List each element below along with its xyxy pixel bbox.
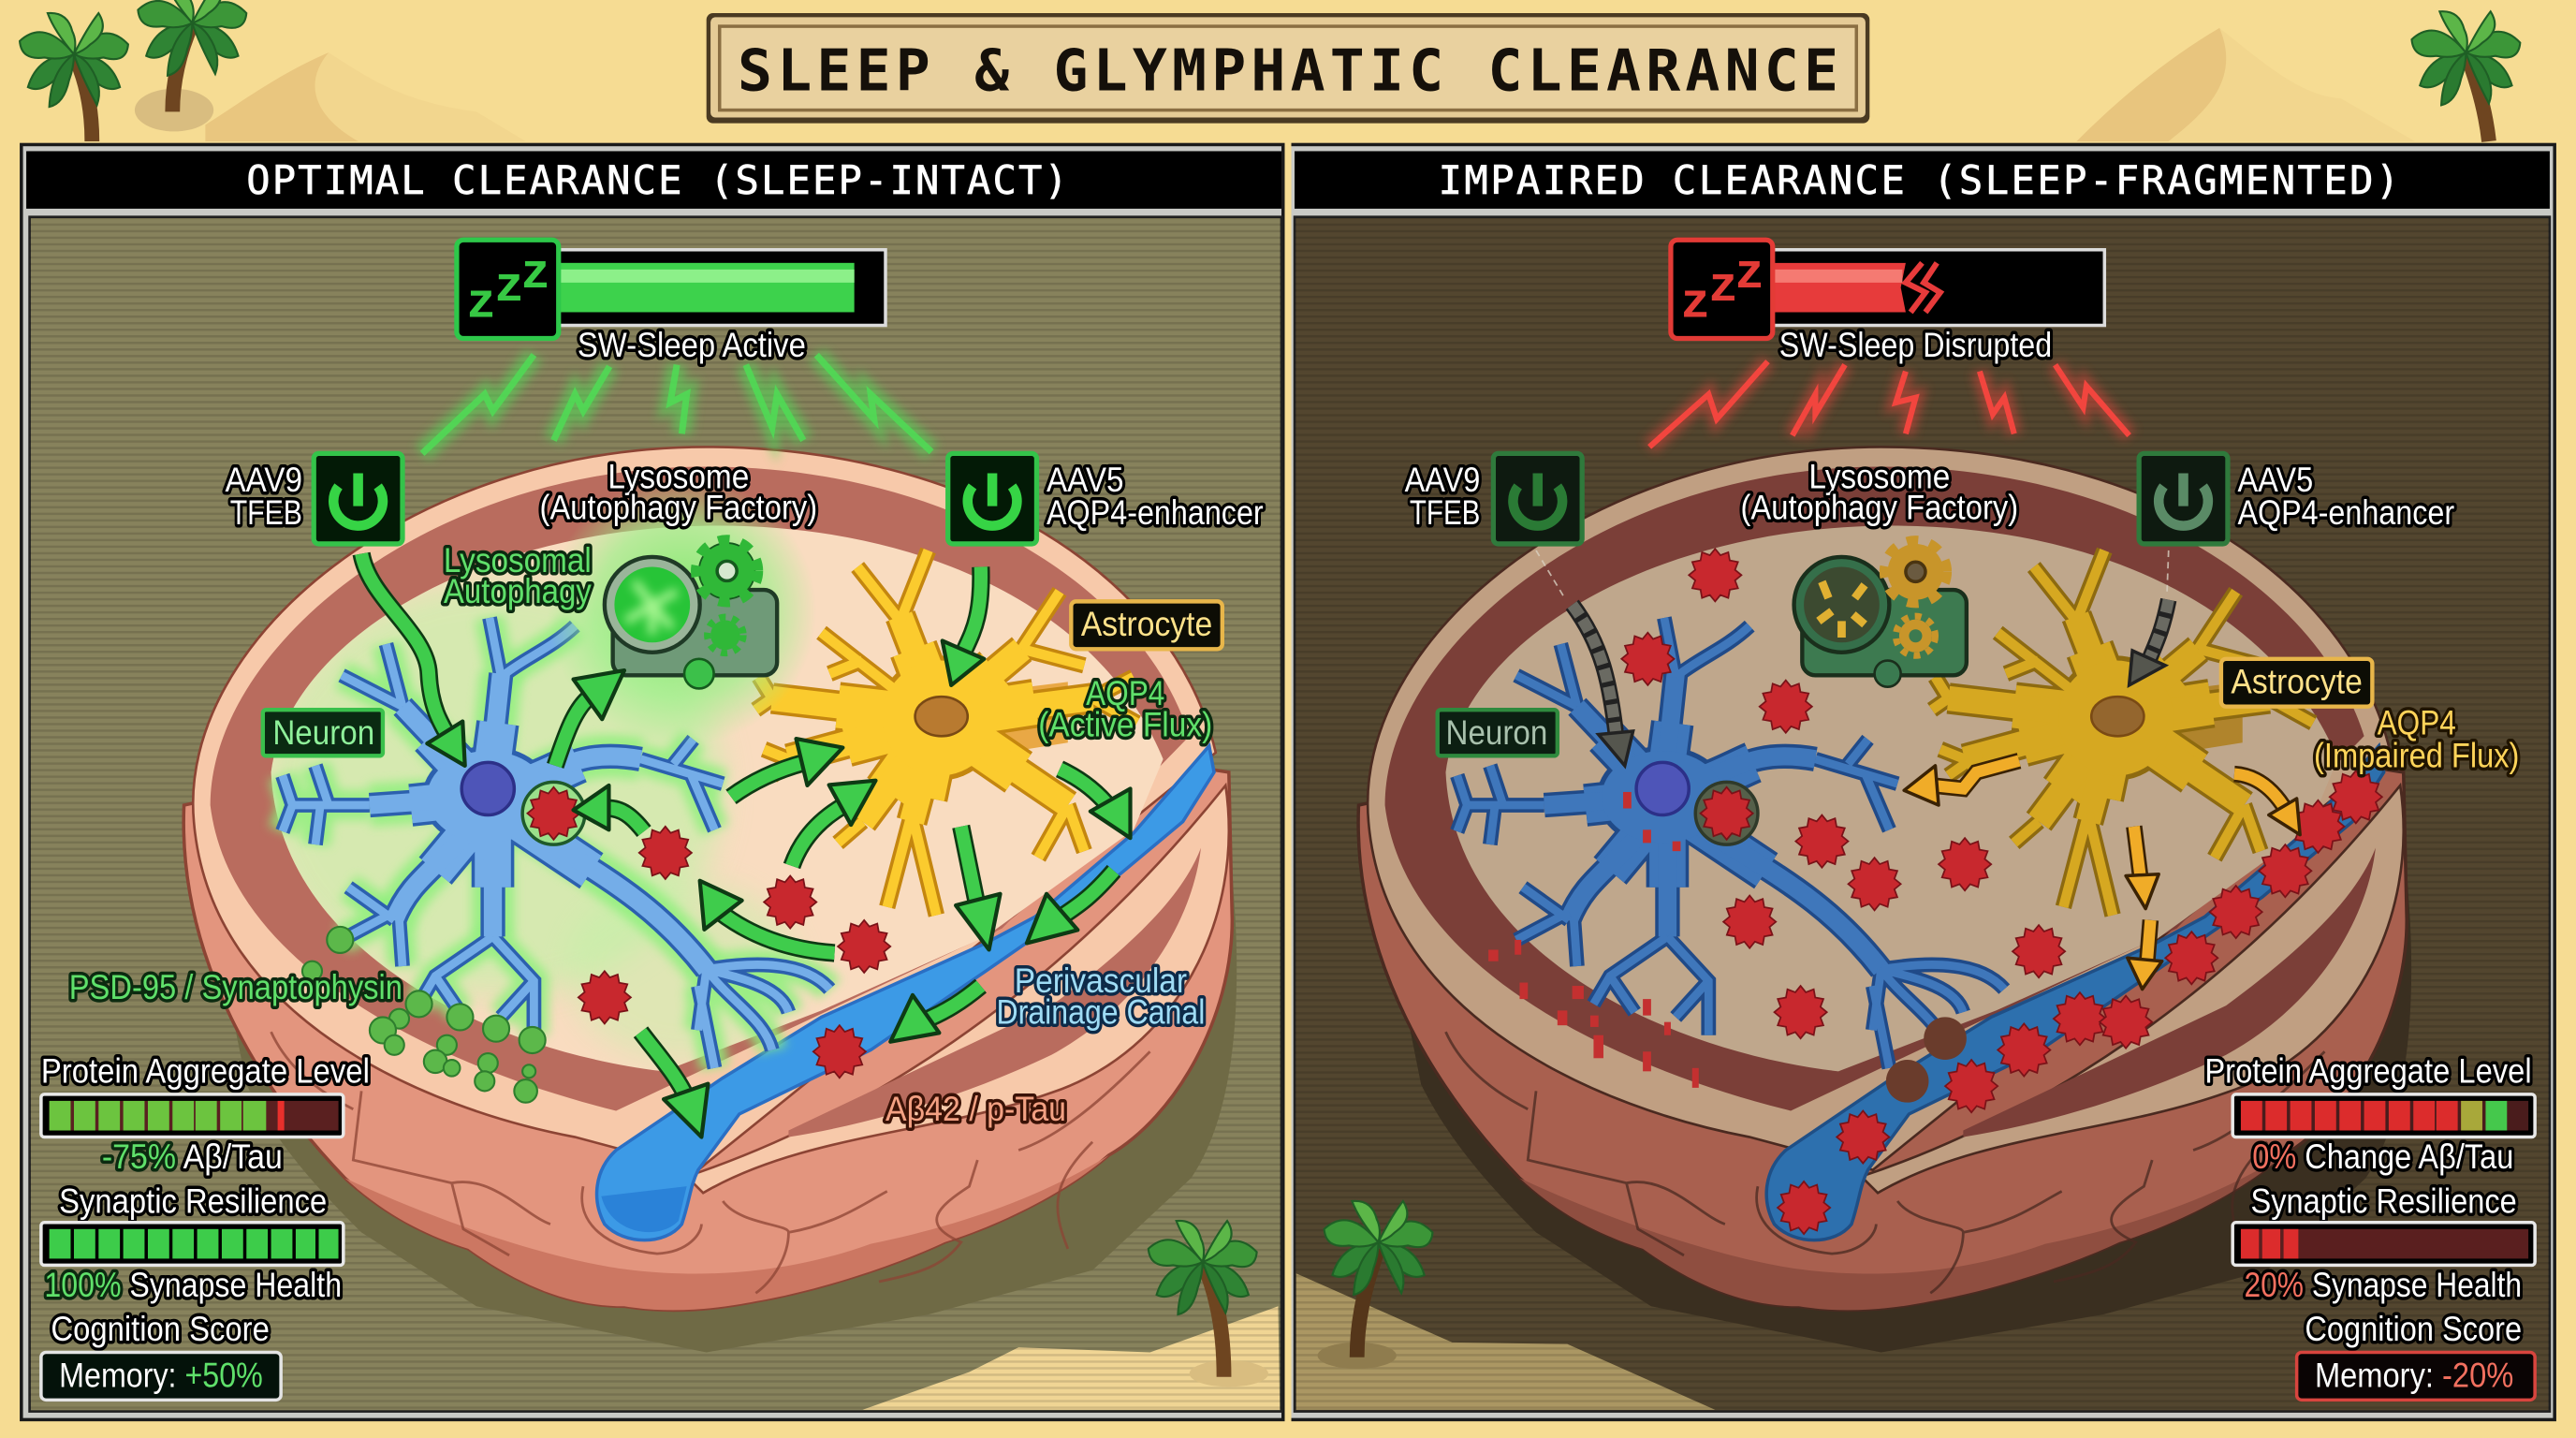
- stat: protein aggregate: Protein Aggregate Level: [41, 1052, 370, 1091]
- stat: synaptic resilience: Synaptic Resilience: [59, 1181, 327, 1220]
- label lysosomal autophagy: [444, 541, 592, 610]
- stat: synaptic resilience: [2232, 1181, 2535, 1304]
- resilience bar: [2232, 1223, 2535, 1265]
- aggregate bar: [2232, 1094, 2535, 1137]
- neuron: [283, 618, 829, 1068]
- failing transport arrows: [1536, 550, 2300, 990]
- power button AAV9: [314, 453, 402, 544]
- label lysosome: Lysosome: [607, 457, 749, 495]
- palm tree: top left front: [20, 13, 128, 141]
- label AAV5 AQP4-enhancer: AQP4-enhancer: [2237, 493, 2454, 532]
- protein aggregates: [1621, 549, 2382, 1234]
- sleep icon: z: [520, 246, 550, 302]
- stat: synaptic resilience: Synaptic Resilience: [2250, 1181, 2517, 1220]
- stalled phagosome: [1695, 782, 1758, 844]
- green flux arrows: [361, 553, 1131, 1137]
- resilience value: 20% Synapse Health: [2244, 1266, 2522, 1304]
- perivascular canal: [597, 746, 1214, 1240]
- label lysosomal autophagy: Lysosomal: [444, 541, 592, 580]
- panel header: [26, 151, 1281, 209]
- label perivascular canal: Drainage Canal: [996, 992, 1205, 1031]
- stat: protein aggregate: [41, 1052, 370, 1176]
- protein aggregates: [578, 827, 890, 1078]
- sleep label: SW-Sleep Active: [578, 326, 806, 364]
- stat: cognition score: Cognition Score: [2305, 1310, 2522, 1348]
- label amyloid tau: Aβ42 / p-Tau: [886, 1090, 1066, 1128]
- resilience bar: [41, 1223, 344, 1265]
- palm tree: top right: [2411, 11, 2520, 141]
- lightning bolts green: [422, 355, 931, 453]
- label AAV5 AQP4-enhancer: [1046, 461, 1264, 532]
- label astrocyte: Astrocyte: [2231, 663, 2363, 701]
- label AQP4 active flux: [1038, 674, 1212, 743]
- label AQP4 impaired flux: AQP4: [2378, 704, 2456, 742]
- label lysosome: (Autophagy Factory): [540, 489, 817, 527]
- lysosome factory: [547, 477, 816, 746]
- sleep icon red: z: [1734, 246, 1764, 302]
- sand: panel bottom right: [862, 1306, 1280, 1410]
- gear: large: [695, 540, 758, 602]
- brain cross-section: [183, 447, 1237, 1352]
- label lysosome: Lysosome: [1808, 457, 1950, 495]
- label AAV9 TFEB: TFEB: [1410, 493, 1480, 532]
- dune: top left: [205, 52, 526, 141]
- neuron: [1457, 618, 2004, 1068]
- stat: cognition score: Cognition Score: [51, 1310, 270, 1348]
- gear: large amber: [1884, 540, 1947, 603]
- synaptic boutons: [302, 927, 546, 1103]
- sleep meter disrupted: [1671, 240, 2104, 339]
- memory box: Memory: -20%: [2315, 1356, 2513, 1394]
- label perivascular canal: [996, 961, 1205, 1031]
- brain cross-section: [1358, 447, 2411, 1352]
- label PSD-95: PSD-95 / Synaptophysin: [69, 968, 402, 1006]
- sleep icon red: z: [1708, 259, 1738, 315]
- label lysosome: (Autophagy Factory): [1741, 489, 2018, 527]
- stat: protein aggregate: [2204, 1052, 2535, 1176]
- stat: cognition score: [41, 1310, 281, 1400]
- label AAV9 TFEB: [225, 461, 302, 532]
- stat: cognition score: [2297, 1310, 2535, 1400]
- label AQP4 active flux: AQP4: [1086, 674, 1164, 712]
- label AQP4 impaired flux: [2314, 704, 2519, 775]
- dune: top right: [2076, 28, 2415, 141]
- label lysosome: [1741, 457, 2018, 527]
- power button AAV9 off: [1493, 453, 1582, 544]
- stat: protein aggregate: Protein Aggregate Level: [2204, 1052, 2532, 1091]
- label astrocyte: Astrocyte: [1081, 605, 1212, 643]
- sleep icon red: [1671, 240, 1773, 339]
- sleep label: SW-Sleep Disrupted: [1779, 326, 2052, 364]
- power button AAV5: [948, 453, 1036, 544]
- sleep meter: [457, 240, 886, 339]
- label neuron: Neuron: [272, 713, 374, 752]
- memory box: Memory: +50%: [59, 1356, 263, 1394]
- sleep icon: z: [494, 259, 524, 315]
- title banner: [707, 13, 1869, 124]
- aggregate value: 0% Change Aβ/Tau: [2252, 1137, 2513, 1176]
- lysosome factory dim: [1794, 540, 1967, 687]
- panel header: [1295, 151, 2550, 209]
- aggregate bar: [41, 1094, 344, 1137]
- palm tree: panel: [1318, 1201, 1432, 1369]
- label AQP4 active flux: (Active Flux): [1038, 705, 1212, 743]
- lightning bolts red: [1649, 361, 2130, 447]
- aggregate value: -75% Aβ/Tau: [102, 1137, 283, 1176]
- sleep icon: z: [466, 276, 496, 332]
- label AAV5 AQP4-enhancer: AAV5: [1046, 461, 1123, 499]
- label AQP4 impaired flux: (Impaired Flux): [2314, 737, 2519, 775]
- sleep icon: [457, 240, 559, 339]
- panel: optimal clearance: [20, 143, 1284, 1421]
- astrocyte: [1932, 550, 2313, 916]
- title text: SLEEP & GLYMPHATIC CLEARANCE: [738, 38, 1838, 105]
- phagosome with protein: [522, 782, 585, 844]
- panel header: IMPAIRED CLEARANCE (SLEEP-FRAGMENTED): [1439, 157, 2399, 203]
- panel: impaired clearance: [1292, 143, 2556, 1421]
- label AAV5 AQP4-enhancer: AQP4-enhancer: [1046, 493, 1264, 532]
- label lysosomal autophagy: Autophagy: [444, 572, 592, 610]
- label neuron: Neuron: [1445, 713, 1547, 752]
- gear: small amber: [1895, 616, 1936, 655]
- astrocyte: [755, 550, 1137, 916]
- sand: panel bottom left: [1296, 1273, 1715, 1410]
- label AAV9 TFEB: [1405, 461, 1480, 532]
- label lysosome: [540, 457, 817, 527]
- resilience value: 100% Synapse Health: [44, 1266, 342, 1304]
- stat: synaptic resilience: [41, 1181, 344, 1304]
- power button AAV5 off: [2139, 453, 2228, 544]
- label AAV5 AQP4-enhancer: [2237, 461, 2454, 532]
- label perivascular canal: Perivascular: [1015, 961, 1187, 1000]
- label AAV9 TFEB: AAV9: [1405, 461, 1480, 499]
- palm tree: top left back: [135, 0, 246, 131]
- label AAV5 AQP4-enhancer: AAV5: [2237, 461, 2313, 499]
- palm tree: panel: [1149, 1221, 1268, 1387]
- perivascular canal clogged: [1766, 746, 2384, 1240]
- label AAV9 TFEB: TFEB: [230, 493, 302, 532]
- synaptic debris: [1488, 792, 1699, 1088]
- panel header: OPTIMAL CLEARANCE (SLEEP-INTACT): [246, 157, 1068, 203]
- label AAV9 TFEB: AAV9: [225, 461, 302, 499]
- gear: small: [708, 617, 743, 653]
- sleep icon red: z: [1680, 276, 1710, 332]
